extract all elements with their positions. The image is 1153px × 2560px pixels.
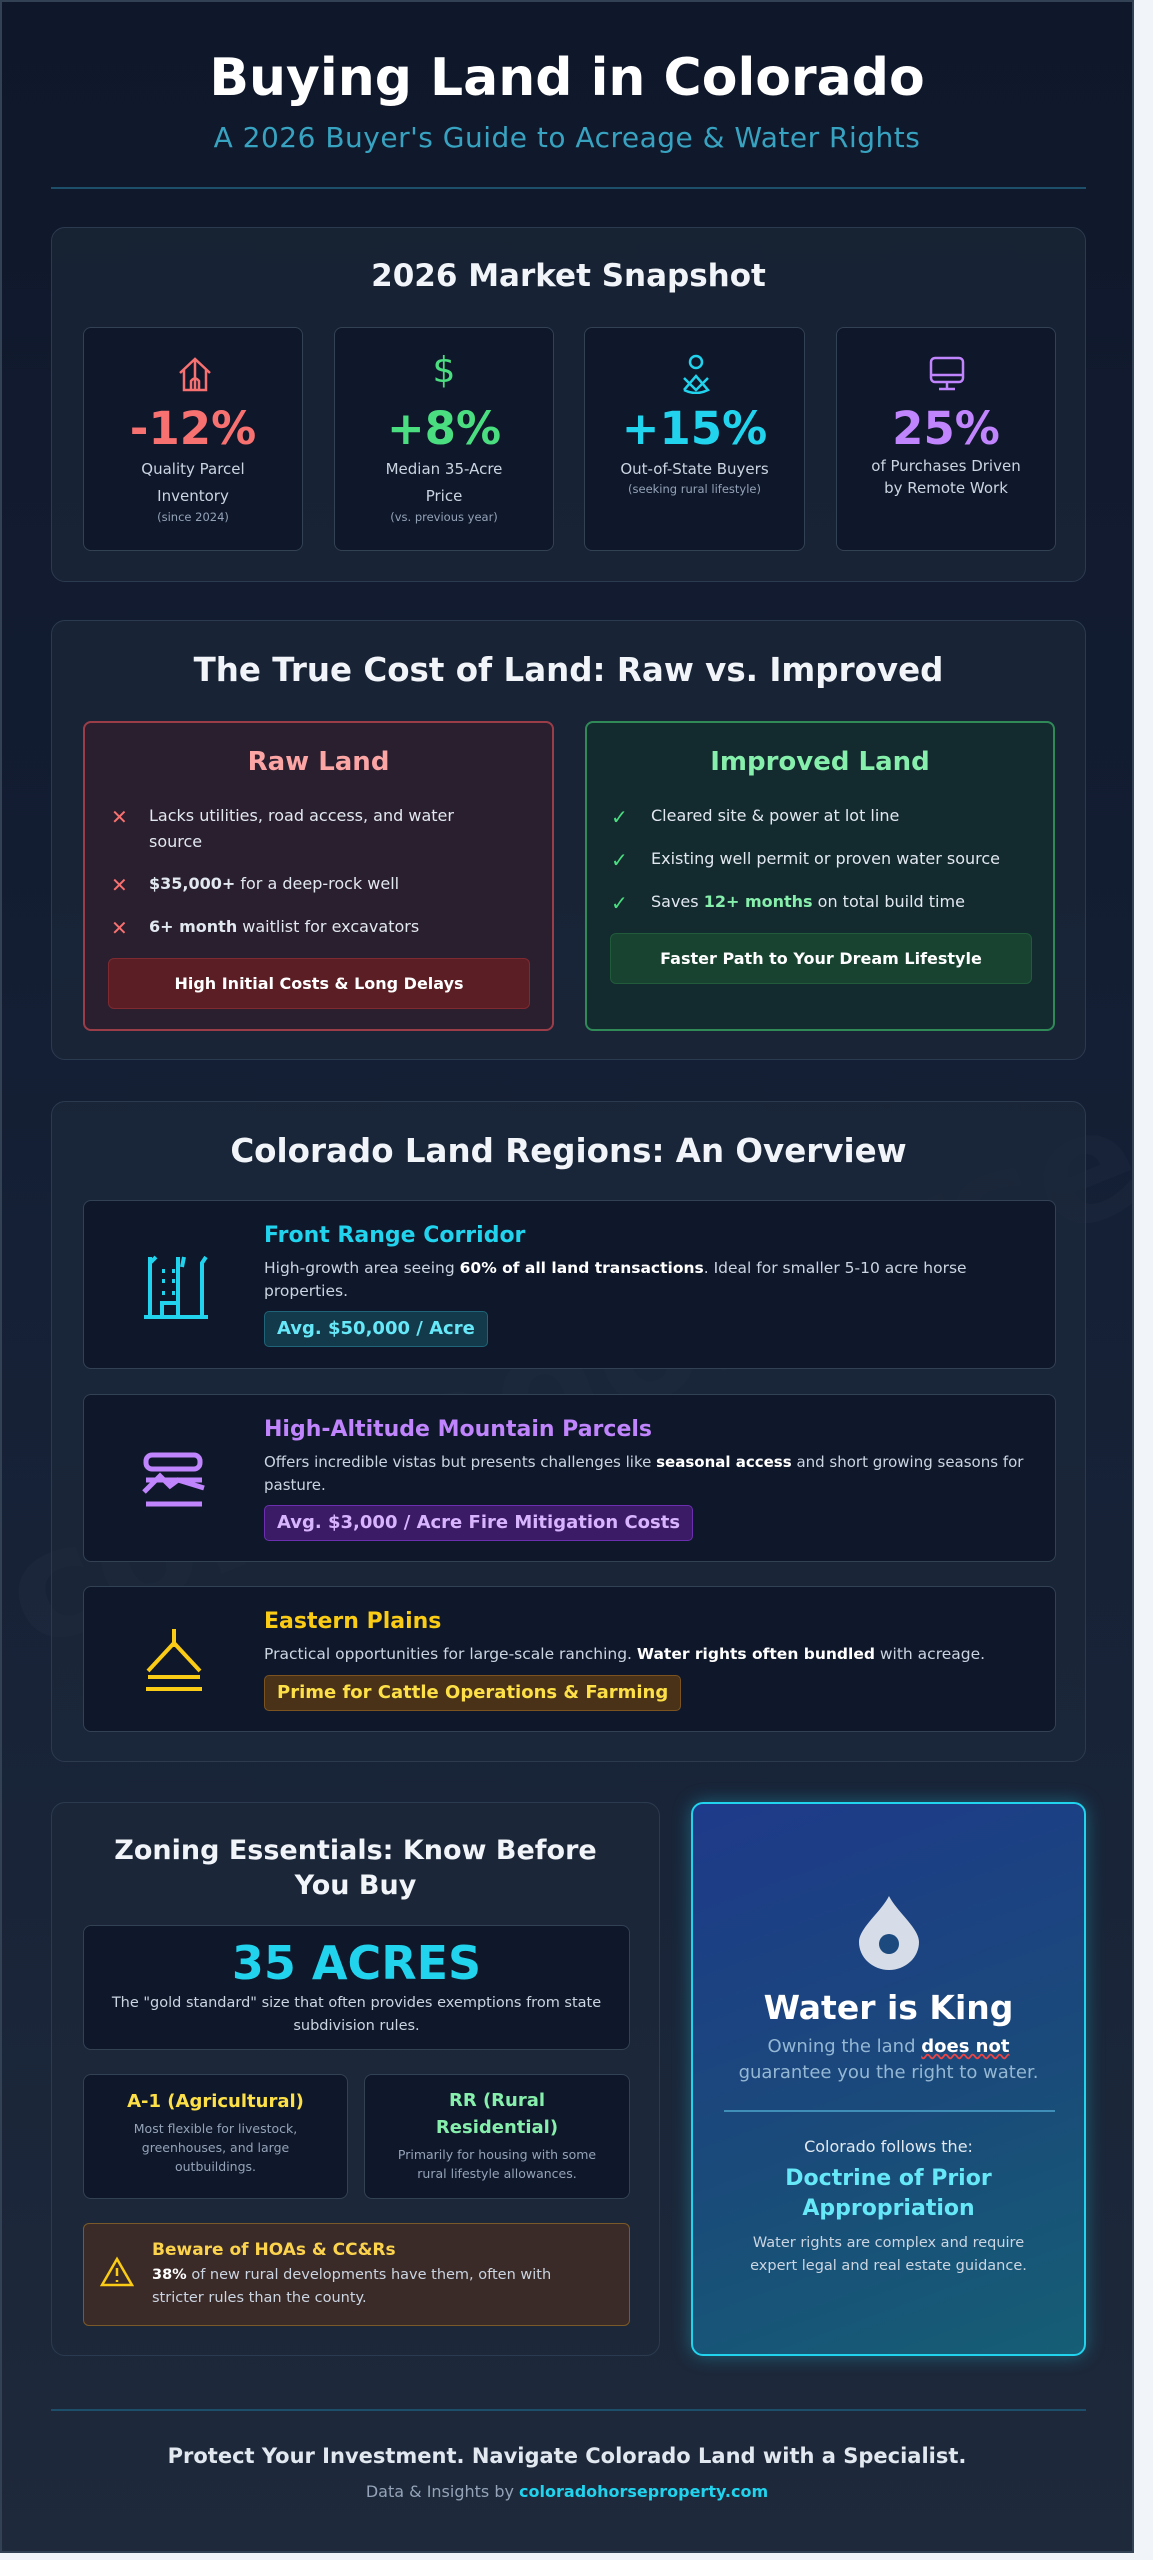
callout: 35 acres (83, 1925, 630, 2050)
region: mountain: pasture. (264, 1476, 326, 1494)
card: raw land: $35,000+ for a deep-rock well (149, 874, 399, 893)
stat card: inventory: -12% (130, 402, 256, 455)
zone card: RR (364, 2074, 630, 2199)
card: improved land: Cleared site & power at lot line (651, 806, 899, 825)
region: eastern plains: Practical opportunities for large-scale ranching. Water rights often bundled with acreage. (264, 1645, 985, 1663)
icon: mountain layers (142, 1452, 205, 1506)
card: raw land: 6+ month waitlist for excavators (149, 917, 419, 936)
stat card: inventory: (since 2024) (157, 510, 229, 524)
stat card: buyers (584, 327, 805, 551)
heading: regions: Colorado Land Regions: An Overview (230, 1132, 907, 1170)
callout: 35 acres: 35 ACRES (232, 1936, 481, 1990)
callout: 35 acres: The "gold standard" size that often provides exemptions from state subdivision rules. (112, 1995, 601, 2034)
banner: improved: Faster Path to Your Dream Lifestyle (660, 949, 982, 968)
list: raw drawbacks (111, 805, 454, 940)
panel: water is king: Doctrine of Prior (785, 2166, 992, 2191)
badge: front range price: Avg. $50,000 / Acre (277, 1318, 475, 1339)
card: raw land: Lacks utilities, road access, and water source (149, 806, 454, 851)
badge: front range price (264, 1311, 488, 1347)
icon: water drop (859, 1896, 919, 1970)
stat card: remote work (836, 327, 1056, 551)
stat card: price: Price (426, 487, 462, 505)
badge: cattle (264, 1675, 681, 1711)
region: mountain: High-Altitude Mountain Parcels (264, 1417, 652, 1442)
stat card: inventory: Inventory (157, 487, 229, 505)
card: raw land (83, 721, 554, 1031)
panel: regions (51, 1101, 1086, 1762)
panel: market snapshot (51, 227, 1086, 582)
stat card: price (334, 327, 554, 551)
card: raw land: ✕ (111, 916, 128, 940)
card: improved land: Improved Land (710, 747, 930, 777)
card: improved land: ✓ (611, 891, 628, 915)
panel: water is king (691, 1802, 1086, 2356)
card: improved land: Existing well permit or proven water source (651, 849, 1000, 868)
card: raw land: ✕ (111, 805, 128, 829)
zone card: RR: Residential) (436, 2117, 558, 2138)
banner: raw (108, 958, 530, 1009)
region: eastern plains: Eastern Plains (264, 1609, 441, 1634)
icon: monitor (930, 356, 964, 390)
badge: fire mitigation: Avg. $3,000 / Acre Fire Mitigation Costs (277, 1512, 680, 1533)
region: mountain: Offers incredible vistas but presents challenges like seasonal access and short growing seasons for (264, 1453, 1023, 1471)
heading: zoning (114, 1835, 597, 1901)
panel: water is king: guarantee you the right to water. (739, 2062, 1038, 2083)
zone card: RR: RR (Rural (449, 2090, 545, 2111)
banner: improved (610, 933, 1032, 984)
badge: cattle: Prime for Cattle Operations & Farming (277, 1682, 668, 1703)
icon: plains (146, 1629, 202, 1691)
warning: HOAs (83, 2223, 630, 2326)
region: front range (83, 1200, 1056, 1369)
card: improved land: Saves 12+ months on total build time (651, 892, 965, 911)
stat card: buyers: +15% (622, 402, 767, 455)
stat card: inventory (83, 327, 303, 551)
card: improved land: ✓ (611, 848, 628, 872)
stat card: price: (vs. previous year) (390, 510, 498, 524)
zone card: A-1 (83, 2074, 348, 2199)
stat card: buyers: (seeking rural lifestyle) (628, 482, 761, 496)
stat card: remote work: by Remote Work (884, 479, 1008, 497)
stat card: buyers: Out-of-State Buyers (620, 460, 769, 478)
subtitle: A 2026 Buyer's Guide to Acreage & Water Rights (214, 121, 920, 154)
stat card: inventory: Quality Parcel (141, 460, 245, 478)
panel: water is king: expert legal and real estate guidance. (750, 2258, 1027, 2274)
stat card: remote work: of Purchases Driven (871, 457, 1021, 475)
panel: water is king: Appropriation (802, 2196, 975, 2221)
card: improved land: ✓ (611, 805, 628, 829)
zone card: A-1: A-1 (Agricultural) (127, 2091, 304, 2112)
zone card: RR: Primarily for housing with some rural lifestyle allowances. (398, 2147, 596, 2181)
icon: dollar: $ (433, 350, 455, 391)
panel: water is king: Water is King (764, 1988, 1013, 2027)
panel: zoning (51, 1802, 660, 2356)
badge: fire mitigation (264, 1505, 693, 1541)
icon: house (179, 357, 211, 392)
panel: water is king: Colorado follows the: (804, 2137, 973, 2156)
icon: buildings (144, 1256, 208, 1319)
card: raw land: Raw Land (248, 747, 389, 777)
footer: call to action: Protect Your Investment. Navigate Colorado Land with a Specialist. (168, 2444, 966, 2468)
zone card: A-1: Most flexible for livestock, greenhouses, and large outbuildings. (134, 2121, 297, 2174)
stat card: price: Median 35-Acre (386, 460, 502, 478)
panel: water is king: Owning the land does not (768, 2036, 1009, 2057)
footer: source: Data & Insights by coloradohorseproperty.com (366, 2482, 768, 2501)
stat card: price: +8% (387, 402, 501, 455)
warning: HOAs: Beware of HOAs & CC&Rs (152, 2240, 396, 2260)
banner: raw: High Initial Costs & Long Delays (174, 974, 464, 993)
heading: true cost: The True Cost of Land: Raw vs. Improved (194, 651, 943, 689)
region: front range: High-growth area seeing 60% of all land transactions. Ideal for smaller 5-10 acre horse properties. (264, 1259, 967, 1300)
panel: true cost (51, 620, 1086, 1060)
stat card: remote work: 25% (892, 402, 1000, 455)
icon: person (683, 354, 710, 394)
icon: warning (100, 2256, 134, 2286)
card: improved land (585, 721, 1055, 1031)
warning: HOAs: 38% of new rural developments have them, often with stricter rules than the county. (152, 2267, 551, 2306)
list: improved benefits (611, 805, 1000, 915)
region: mountain (83, 1394, 1056, 1562)
region: eastern plains (83, 1586, 1056, 1732)
region: front range: Front Range Corridor (264, 1223, 525, 1248)
card: raw land: ✕ (111, 873, 128, 897)
heading: zoning: Zoning Essentials: Know Before (114, 1835, 597, 1866)
title: Buying Land in Colorado (209, 48, 925, 108)
panel: water is king: Water rights are complex and require (753, 2235, 1024, 2251)
heading: zoning: You Buy (295, 1870, 416, 1901)
heading: market snapshot: 2026 Market Snapshot (371, 258, 766, 294)
